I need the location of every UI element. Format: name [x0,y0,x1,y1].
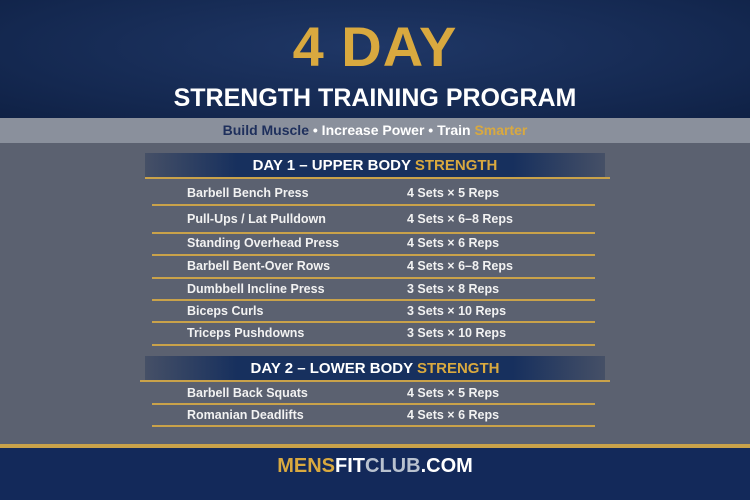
website: MENSFITCLUB.COM [277,455,473,477]
day 1 rows: 4 Sets × 6–8 Reps [407,259,513,273]
day 2 header [145,356,605,381]
day 1 rows: Standing Overhead Press [187,236,339,250]
day 1 rows: Barbell Bench Press [187,186,309,200]
day 1 header: DAY 1 – UPPER BODY STRENGTH [253,157,497,174]
day 2 header: DAY 2 – LOWER BODY STRENGTH [251,360,499,377]
day 1 rows: Triceps Pushdowns [187,326,304,340]
day 1 rows: Dumbbell Incline Press [187,282,325,296]
day 1 header [145,153,605,178]
day 2 rows: Romanian Deadlifts [187,408,304,422]
day 2 rows: 4 Sets × 6 Reps [407,408,499,422]
day 1 rows: 4 Sets × 6 Reps [407,236,499,250]
day 2 rows [152,386,595,427]
footer [0,448,750,500]
day 1 rows: Biceps Curls [187,304,263,318]
day 1 rows [152,186,595,346]
day 1 rows: 3 Sets × 8 Reps [407,282,499,296]
day 1 rows: Pull-Ups / Lat Pulldown [187,212,326,226]
day 1 rows: 4 Sets × 6–8 Reps [407,212,513,226]
day 1 rows: Barbell Bent-Over Rows [187,259,330,273]
day 1 rows: 3 Sets × 10 Reps [407,326,506,340]
tagline band [0,118,750,143]
header [0,0,750,118]
subtitle: STRENGTH TRAINING PROGRAM [174,84,576,112]
title: 4 DAY: 4 DAY [293,15,457,78]
day 2 rows: 4 Sets × 5 Reps [407,386,499,400]
day 1 rows: 3 Sets × 10 Reps [407,304,506,318]
day 2 rows: Barbell Back Squats [187,386,308,400]
tagline band: Build Muscle • Increase Power • Train Smarter [223,122,527,138]
day 1 rows: 4 Sets × 5 Reps [407,186,499,200]
